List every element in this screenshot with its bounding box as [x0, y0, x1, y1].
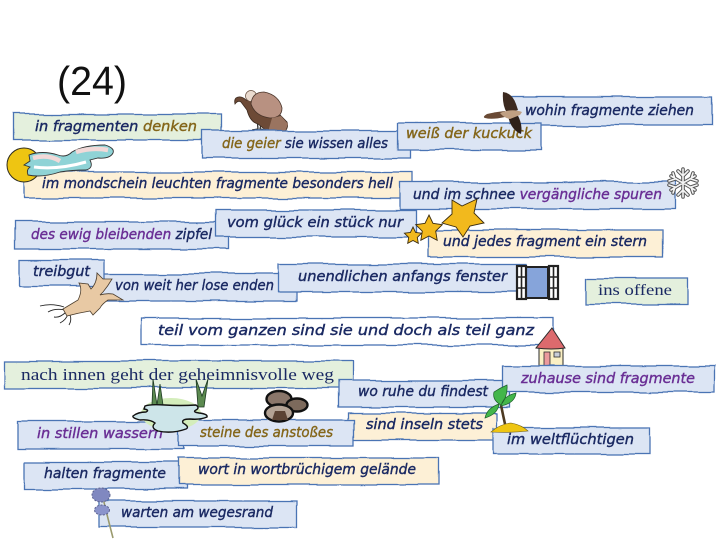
icon: palm island: [485, 385, 528, 432]
label: nach innen geht der geheimnisvolle weg: nach innen geht der geheimnisvolle weg: [21, 365, 335, 384]
label: wo ruhe du findest: [338, 381, 510, 407]
label: und im schnee: und im schnee vergängliche spuren: [413, 187, 662, 203]
title: (24): [57, 58, 127, 104]
label: treibgut: treibgut: [33, 264, 91, 280]
label: in fragmenten denken: in fragmenten denken: [35, 119, 197, 135]
icon: stones: [265, 391, 308, 422]
label: steine des anstoßes: [179, 420, 354, 446]
label: und im schnee: [400, 182, 675, 209]
label: sind inseln stets: sind inseln stets: [366, 417, 483, 433]
label: wort in wortbrüchigem gelände: wort in wortbrüchigem gelände: [198, 462, 416, 478]
label: wohin fragmente ziehen: [510, 97, 712, 125]
icon: snowflake: [669, 169, 697, 197]
label: teil vom ganzen: teil vom ganzen sind sie und doch als teil ganz: [158, 323, 535, 339]
label: weiß der kuckuck: weiß der kuckuck: [406, 126, 533, 142]
label: ins offene: [586, 278, 687, 304]
label: warten am wegesrand: [99, 501, 297, 527]
icon: stars: [404, 199, 484, 243]
label: im weltflüchtigen: im weltflüchtigen: [507, 432, 634, 448]
icon: window: [517, 266, 558, 299]
label: und jedes fragment ein stern: [428, 230, 663, 257]
icon: moon: [7, 148, 41, 182]
label: im mondschein: [24, 172, 412, 198]
label: nach innen geht der geheimnisvolle weg: [4, 361, 352, 388]
label: in fragmenten denken: [13, 114, 221, 140]
label: in stillen wassern: in stillen wassern: [37, 426, 163, 442]
moon with cloud: [7, 145, 113, 182]
icon: house: [536, 328, 565, 367]
label: wort in wortbrüchigem gelände: [178, 458, 438, 485]
label: von weit her lose enden: von weit her lose enden: [115, 278, 274, 294]
label: in stillen wassern: [17, 422, 184, 449]
label: vom glück ein stück nur: vom glück ein stück nur: [227, 215, 404, 231]
label: des ewig bleibenden zipfel: [14, 222, 229, 249]
icon: cloud: [24, 145, 113, 176]
icon: driftwood root: [40, 273, 123, 325]
label: unendlichen anfangs fenster: unendlichen anfangs fenster: [298, 269, 508, 285]
icon: cornflower: [92, 488, 113, 538]
label: halten fragmente: [24, 462, 186, 489]
label: des ewig bleibenden zipfel: des ewig bleibenden zipfel: [31, 227, 212, 243]
label: die geier sie wissen alles: die geier sie wissen alles: [222, 136, 388, 152]
label: im weltflüchtigen: [493, 428, 649, 454]
label: wo ruhe du findest: wo ruhe du findest: [358, 384, 488, 400]
label: weiß der kuckuck: [398, 123, 541, 150]
icon: vulture: [235, 90, 288, 132]
label: und jedes fragment ein stern: und jedes fragment ein stern: [443, 234, 647, 250]
label: zuhause sind fragmente: [503, 366, 715, 392]
label: sind inseln stets: [348, 413, 497, 440]
label: im mondschein: im mondschein leuchten fragmente besonders hell: [42, 176, 393, 192]
icon: pond: [133, 379, 208, 432]
label: vom glück ein stück nur: [217, 210, 416, 237]
label: zuhause sind fragmente: zuhause sind fragmente: [520, 371, 695, 387]
label: teil vom ganzen: [142, 318, 553, 345]
label: von weit her lose enden: [95, 274, 297, 301]
label: warten am wegesrand: warten am wegesrand: [121, 505, 273, 521]
icon: flying bird: [484, 92, 522, 134]
label: ins offene: ins offene: [598, 282, 672, 299]
label: steine des anstoßes: steine des anstoßes: [200, 425, 333, 441]
label: treibgut: [19, 260, 104, 286]
label: wohin fragmente ziehen: wohin fragmente ziehen: [525, 103, 694, 119]
label: unendlichen anfangs fenster: [279, 264, 525, 292]
label: die geier sie wissen alles: [202, 131, 410, 158]
label: halten fragmente: halten fragmente: [44, 466, 166, 482]
